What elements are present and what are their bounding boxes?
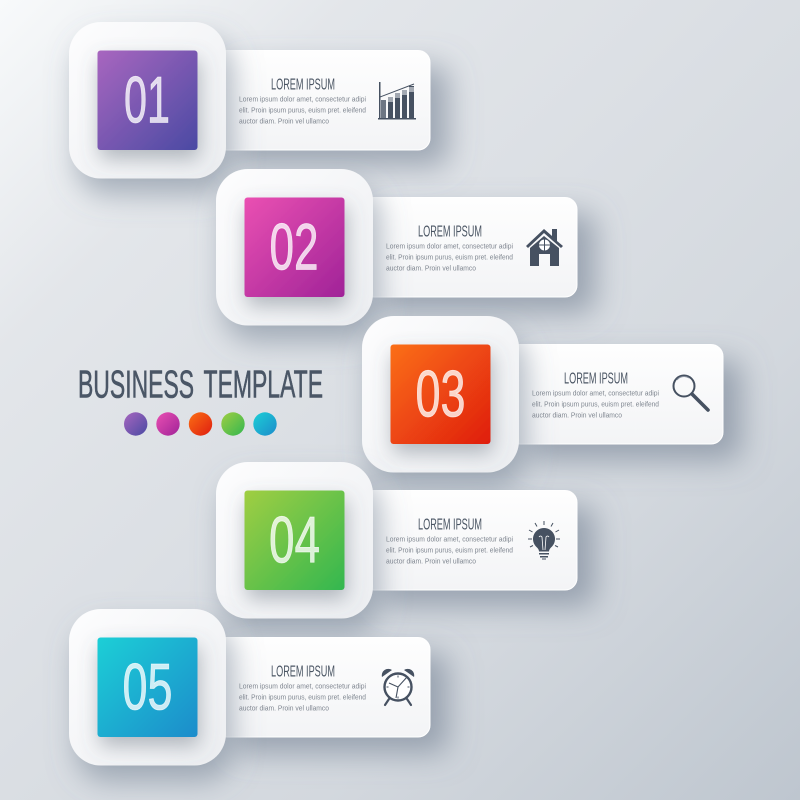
panel: step 01 (69, 22, 430, 178)
tile 01 (69, 22, 226, 178)
text block 02: auctor diam. Proin vel ullamco (386, 264, 476, 272)
text block 04 (386, 534, 513, 566)
text block 05: Lorem ipsum dolor amet, consectetur adipi (239, 682, 366, 690)
text block 02: elit. Proin ipsum purus, euism pret. eleifend (386, 252, 513, 262)
colour dots (124, 412, 277, 436)
text block 04: auctor diam. Proin vel ullamco (386, 556, 476, 566)
panel: step 03 (362, 316, 723, 472)
text block 01 (239, 94, 366, 126)
heading 04: LOREM IPSUM (418, 516, 482, 534)
title: BUSINESS TEMPLATE (78, 364, 323, 406)
text block 01: Lorem ipsum dolor amet, consectetur adipi (239, 94, 366, 104)
text block 04: Lorem ipsum dolor amet, consectetur adipi (386, 534, 513, 544)
number square 04 (244, 490, 344, 590)
text block 01: auctor diam. Proin vel ullamco (239, 116, 329, 126)
panel: step 04 (216, 462, 577, 618)
panel: step 02 (216, 169, 577, 326)
text block 01: elit. Proin ipsum purus, euism pret. eleifend (239, 106, 366, 114)
heading 01: LOREM IPSUM (271, 76, 335, 94)
icon: light bulb (528, 521, 560, 560)
text block 03 (532, 388, 659, 420)
tile 02 (216, 169, 373, 326)
text block 02 (386, 242, 513, 272)
card 03 (508, 344, 723, 444)
text block 03: elit. Proin ipsum purus, euism pret. eleifend (532, 400, 659, 408)
card 05 (215, 638, 430, 737)
tile 05 (69, 609, 226, 766)
icon: house (526, 229, 563, 266)
number 04: 04 (269, 502, 320, 576)
text block 05: auctor diam. Proin vel ullamco (239, 704, 329, 712)
number square 01 (98, 50, 198, 150)
tile 03 (362, 316, 519, 472)
text block 02: Lorem ipsum dolor amet, consectetur adipi (386, 242, 513, 250)
text block 05 (239, 682, 366, 712)
number 01: 01 (124, 62, 170, 136)
card 04 (362, 490, 577, 590)
number 05: 05 (122, 650, 172, 724)
icon: bar chart (378, 82, 416, 120)
text block 04: elit. Proin ipsum purus, euism pret. eleifend (386, 546, 513, 554)
number 03: 03 (416, 356, 466, 430)
panel: step 05 (69, 609, 430, 766)
number square 05 (98, 638, 198, 737)
card 02 (362, 198, 577, 297)
card 01 (215, 50, 430, 150)
number square 03 (390, 344, 490, 444)
heading 02: LOREM IPSUM (418, 224, 482, 240)
heading 05: LOREM IPSUM (271, 664, 335, 680)
icon: magnifier (674, 376, 708, 410)
text block 03: auctor diam. Proin vel ullamco (532, 410, 622, 420)
number 02: 02 (270, 210, 318, 284)
icon: alarm clock (382, 669, 414, 705)
tile 04 (216, 462, 373, 618)
heading 03: LOREM IPSUM (564, 370, 628, 388)
text block 05: elit. Proin ipsum purus, euism pret. eleifend (239, 692, 366, 702)
text block 03: Lorem ipsum dolor amet, consectetur adipi (532, 388, 659, 398)
number square 02 (244, 198, 344, 297)
